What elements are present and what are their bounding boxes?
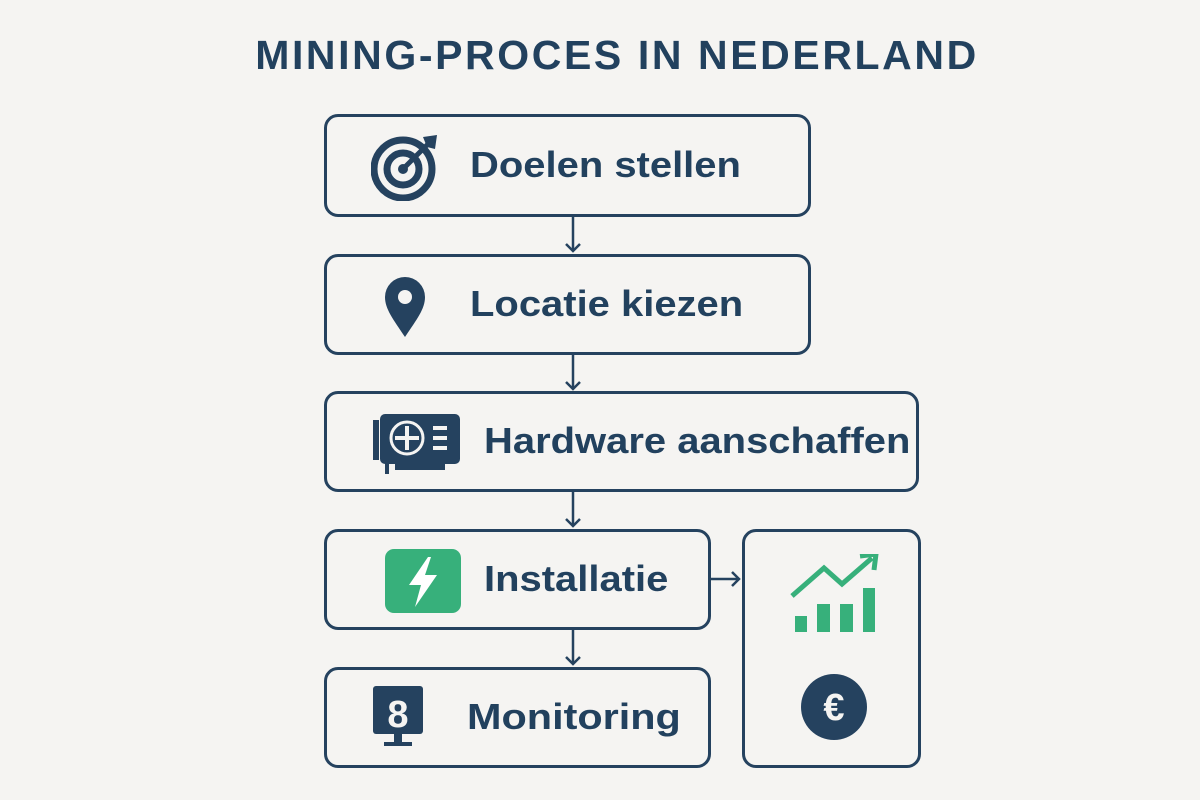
arrow 3 (565, 492, 581, 528)
step 2: Locatie kiezen (324, 254, 811, 355)
label: Installatie (484, 558, 668, 599)
title: MINING-PROCES IN NEDERLAND (255, 32, 979, 78)
label: Locatie kiezen (470, 283, 743, 324)
arrow 2 (565, 355, 581, 391)
icon: GPU card (373, 414, 460, 474)
step 4: Installatie (324, 529, 711, 630)
label: Monitoring (467, 696, 681, 737)
icon: monitor: 8 (387, 694, 409, 736)
icon: euro coin: € (823, 687, 845, 729)
step 5: Monitoring (324, 667, 711, 768)
icon: growth chart (790, 554, 878, 632)
arrow to results (711, 571, 741, 587)
icon: monitor (373, 686, 423, 746)
arrow 4 (565, 630, 581, 666)
icon: target (371, 135, 437, 201)
icon: euro coin (801, 674, 867, 740)
step 1: Doelen stellen (324, 114, 811, 217)
label: Doelen stellen (470, 144, 741, 185)
step 3: Hardware aanschaffen (324, 391, 919, 492)
icon: power bolt (385, 549, 461, 613)
icon: location pin (385, 277, 425, 337)
arrow 1 (565, 217, 581, 253)
label: Hardware aanschaffen (484, 420, 910, 461)
panel: results (742, 529, 921, 768)
